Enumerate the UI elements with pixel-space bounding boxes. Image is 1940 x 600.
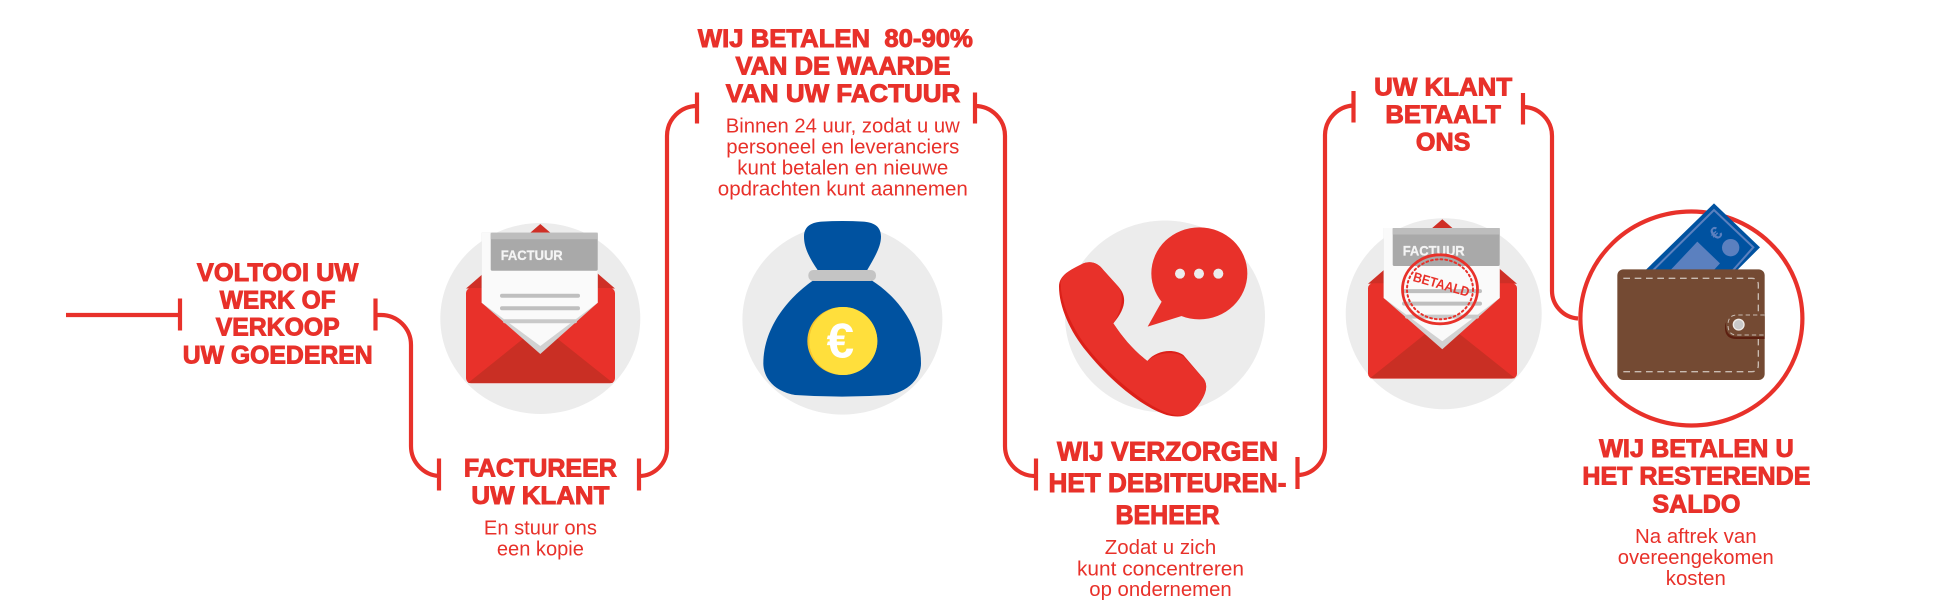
icon: envelope with paid stamp: BETAALD — [1411, 269, 1472, 300]
icon: invoice envelope — [466, 224, 615, 383]
text: na aftrek van overeengekomen kosten — [1618, 526, 1774, 590]
icon: wallet with banknote: € — [1706, 223, 1726, 244]
heading: uw klant betaalt ons: UW KLANT — [1374, 74, 1512, 102]
connector: step 3 to step 4 — [975, 92, 1036, 490]
heading: wij betalen u het resterende saldo: SALDO — [1652, 490, 1740, 518]
heading: factureer uw klant: UW KLANT — [471, 482, 609, 510]
heading: wij betalen 80-90% — [698, 25, 973, 108]
text: na aftrek van overeengekomen kosten: overeengekomen — [1618, 547, 1774, 569]
icon: wallet with banknote — [1617, 203, 1765, 380]
icon: grey disc behind telephone — [1065, 220, 1265, 412]
connector: step 4 to step 5 — [1298, 91, 1354, 489]
heading: voltooi uw werk: VOLTOOI UW — [197, 260, 359, 287]
heading: wij betalen 80-90%: VAN UW FACTUUR — [726, 80, 960, 108]
connector: step 5 to step 6 — [1523, 93, 1578, 318]
heading: uw klant betaalt ons — [1374, 74, 1512, 157]
icon: invoice envelope: FACTUUR — [501, 247, 563, 263]
text: zodat u zich kunt concentreren: Zodat u zich — [1105, 537, 1216, 559]
heading: wij betalen 80-90%: WIJ BETALEN 80-90% — [698, 25, 973, 53]
text: na aftrek van overeengekomen kosten: kosten — [1666, 568, 1726, 590]
heading: wij verzorgen het debiteurenbeheer — [1048, 436, 1286, 530]
icon: telephone with speech bubble — [1059, 227, 1247, 417]
text: binnen 24 uur: kunt betalen en nieuwe — [737, 158, 948, 180]
heading: wij betalen u het resterende saldo — [1582, 435, 1810, 518]
heading: uw klant betaalt ons: BETAALT — [1385, 101, 1501, 129]
text: binnen 24 uur: personeel en leveranciers — [726, 136, 959, 158]
text: binnen 24 uur: opdrachten kunt aannemen — [718, 179, 968, 201]
connector: step 2 to step 3 — [639, 92, 697, 490]
heading: wij betalen u het resterende saldo: HET RESTERENDE — [1582, 462, 1810, 490]
heading: wij verzorgen het debiteurenbeheer: WIJ VERZORGEN — [1057, 436, 1278, 466]
heading: voltooi uw werk: WERK OF — [220, 287, 336, 314]
icon: grey disc behind money bag — [742, 225, 942, 415]
text: en stuur ons een kopie: En stuur ons — [484, 517, 597, 539]
heading: factureer uw klant — [464, 455, 617, 510]
heading: voltooi uw werk: VERKOOP — [216, 315, 340, 342]
heading: wij verzorgen het debiteurenbeheer: HET DEBITEUREN- — [1048, 468, 1286, 498]
text: na aftrek van overeengekomen kosten: Na aftrek van — [1635, 526, 1757, 548]
icon: money bag with euro coin: € — [827, 314, 854, 369]
heading: factureer uw klant: FACTUREER — [464, 455, 617, 483]
icon: envelope with paid stamp: FACTUUR — [1403, 242, 1465, 258]
connector: start line to step 1 — [66, 298, 180, 330]
heading: wij betalen u het resterende saldo: WIJ BETALEN U — [1599, 435, 1794, 463]
heading: wij betalen 80-90%: VAN DE WAARDE — [736, 53, 950, 81]
heading: voltooi uw werk: UW GOEDEREN — [183, 342, 373, 369]
icon: red ring around wallet — [1580, 212, 1802, 426]
icon: envelope with paid stamp — [1368, 219, 1517, 379]
icon: grey disc behind paid envelope — [1346, 218, 1542, 409]
text: zodat u zich kunt concentreren: kunt concentreren — [1077, 558, 1244, 580]
text: binnen 24 uur — [718, 115, 968, 201]
text: en stuur ons een kopie — [484, 517, 597, 560]
heading: uw klant betaalt ons: ONS — [1416, 129, 1470, 157]
text: zodat u zich kunt concentreren — [1077, 537, 1244, 600]
text: binnen 24 uur: Binnen 24 uur, zodat u uw — [726, 115, 960, 137]
icon: grey disc behind invoice envelope — [440, 223, 640, 414]
connector: step 1 to step 2 — [376, 298, 439, 490]
heading: wij verzorgen het debiteurenbeheer: BEHEER — [1116, 500, 1220, 530]
icon: money bag with euro coin — [763, 221, 921, 397]
heading: voltooi uw werk — [183, 260, 373, 369]
text: en stuur ons een kopie: een kopie — [497, 538, 584, 560]
